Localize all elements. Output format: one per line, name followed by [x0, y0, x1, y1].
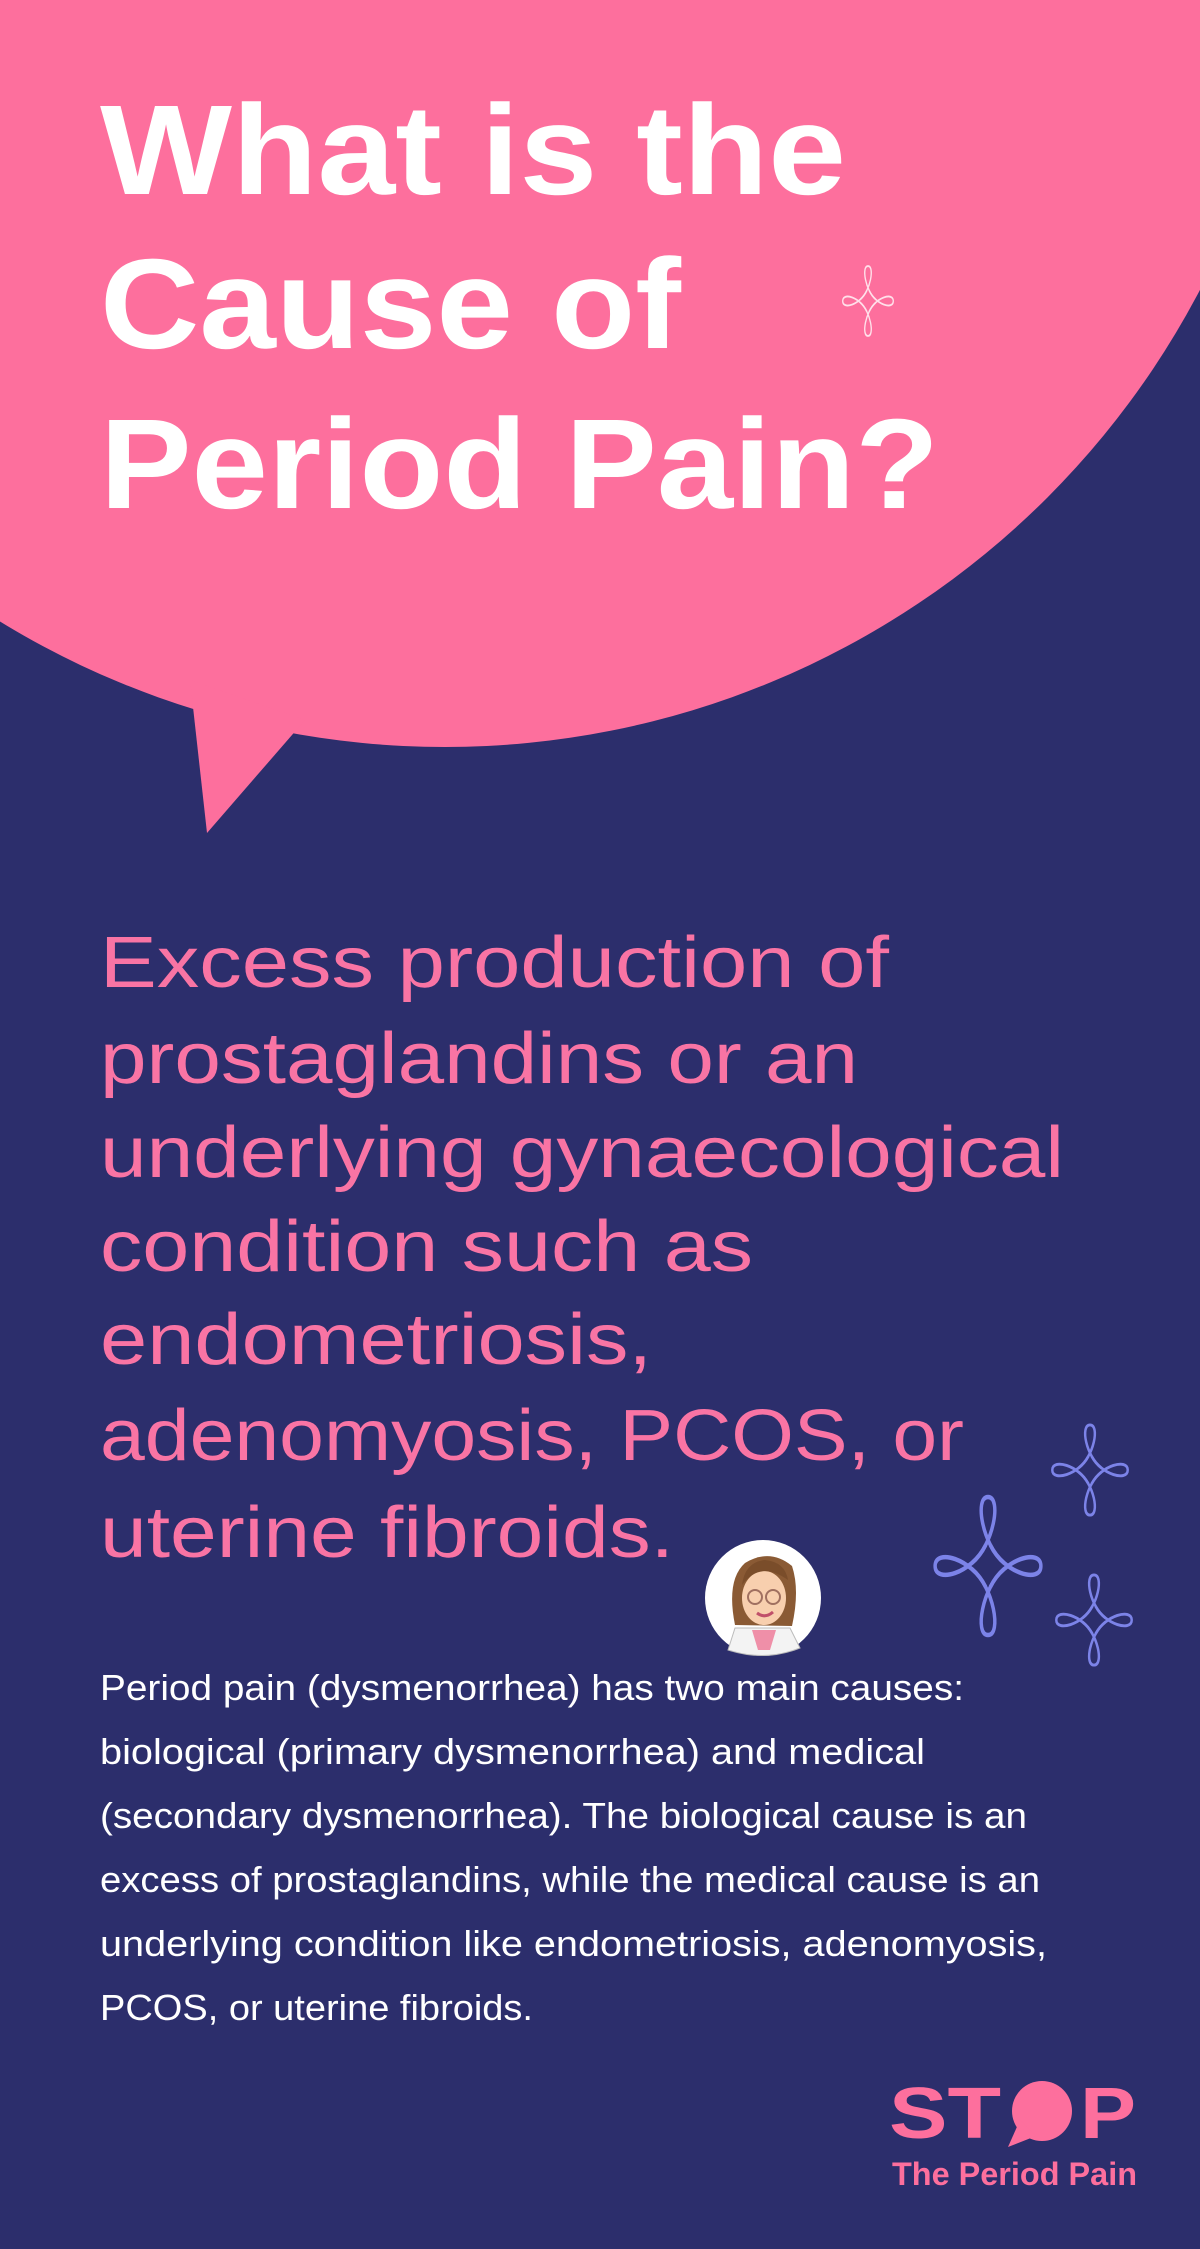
subtitle: condition such as	[100, 1207, 753, 1287]
subtitle: prostaglandins or an	[100, 1019, 858, 1099]
logo: The Period Pain	[892, 2156, 1137, 2192]
logo	[889, 2074, 1137, 2192]
icon: doctor avatar	[705, 1540, 821, 1656]
body paragraph: Period pain (dysmenorrhea) has two main causes:	[100, 1667, 964, 1708]
title: Cause of	[100, 233, 681, 376]
icon: sparkle pink	[843, 266, 893, 336]
body paragraph: (secondary dysmenorrhea). The biological cause is an	[100, 1795, 1027, 1836]
body paragraph: biological (primary dysmenorrhea) and medical	[100, 1731, 925, 1772]
title: What is the	[100, 79, 846, 222]
logo: P	[1080, 2074, 1136, 2154]
body paragraph: excess of prostaglandins, while the medical cause is an	[100, 1859, 1040, 1900]
title	[100, 79, 939, 536]
subtitle	[100, 923, 1064, 1573]
body paragraph: PCOS, or uterine fibroids.	[100, 1987, 533, 2028]
subtitle: uterine fibroids.	[100, 1493, 674, 1573]
subtitle: adenomyosis, PCOS, or	[100, 1396, 964, 1476]
body paragraph	[100, 1667, 1047, 2028]
logo: ST	[889, 2074, 1001, 2154]
icon: sparkles blue	[935, 1425, 1132, 1665]
title: Period Pain?	[100, 393, 939, 536]
subtitle: underlying gynaecological	[100, 1113, 1064, 1193]
subtitle: Excess production of	[100, 923, 890, 1003]
body paragraph: underlying condition like endometriosis, adenomyosis,	[100, 1923, 1047, 1964]
speech bubble	[0, 0, 1200, 833]
subtitle: endometriosis,	[100, 1300, 652, 1380]
